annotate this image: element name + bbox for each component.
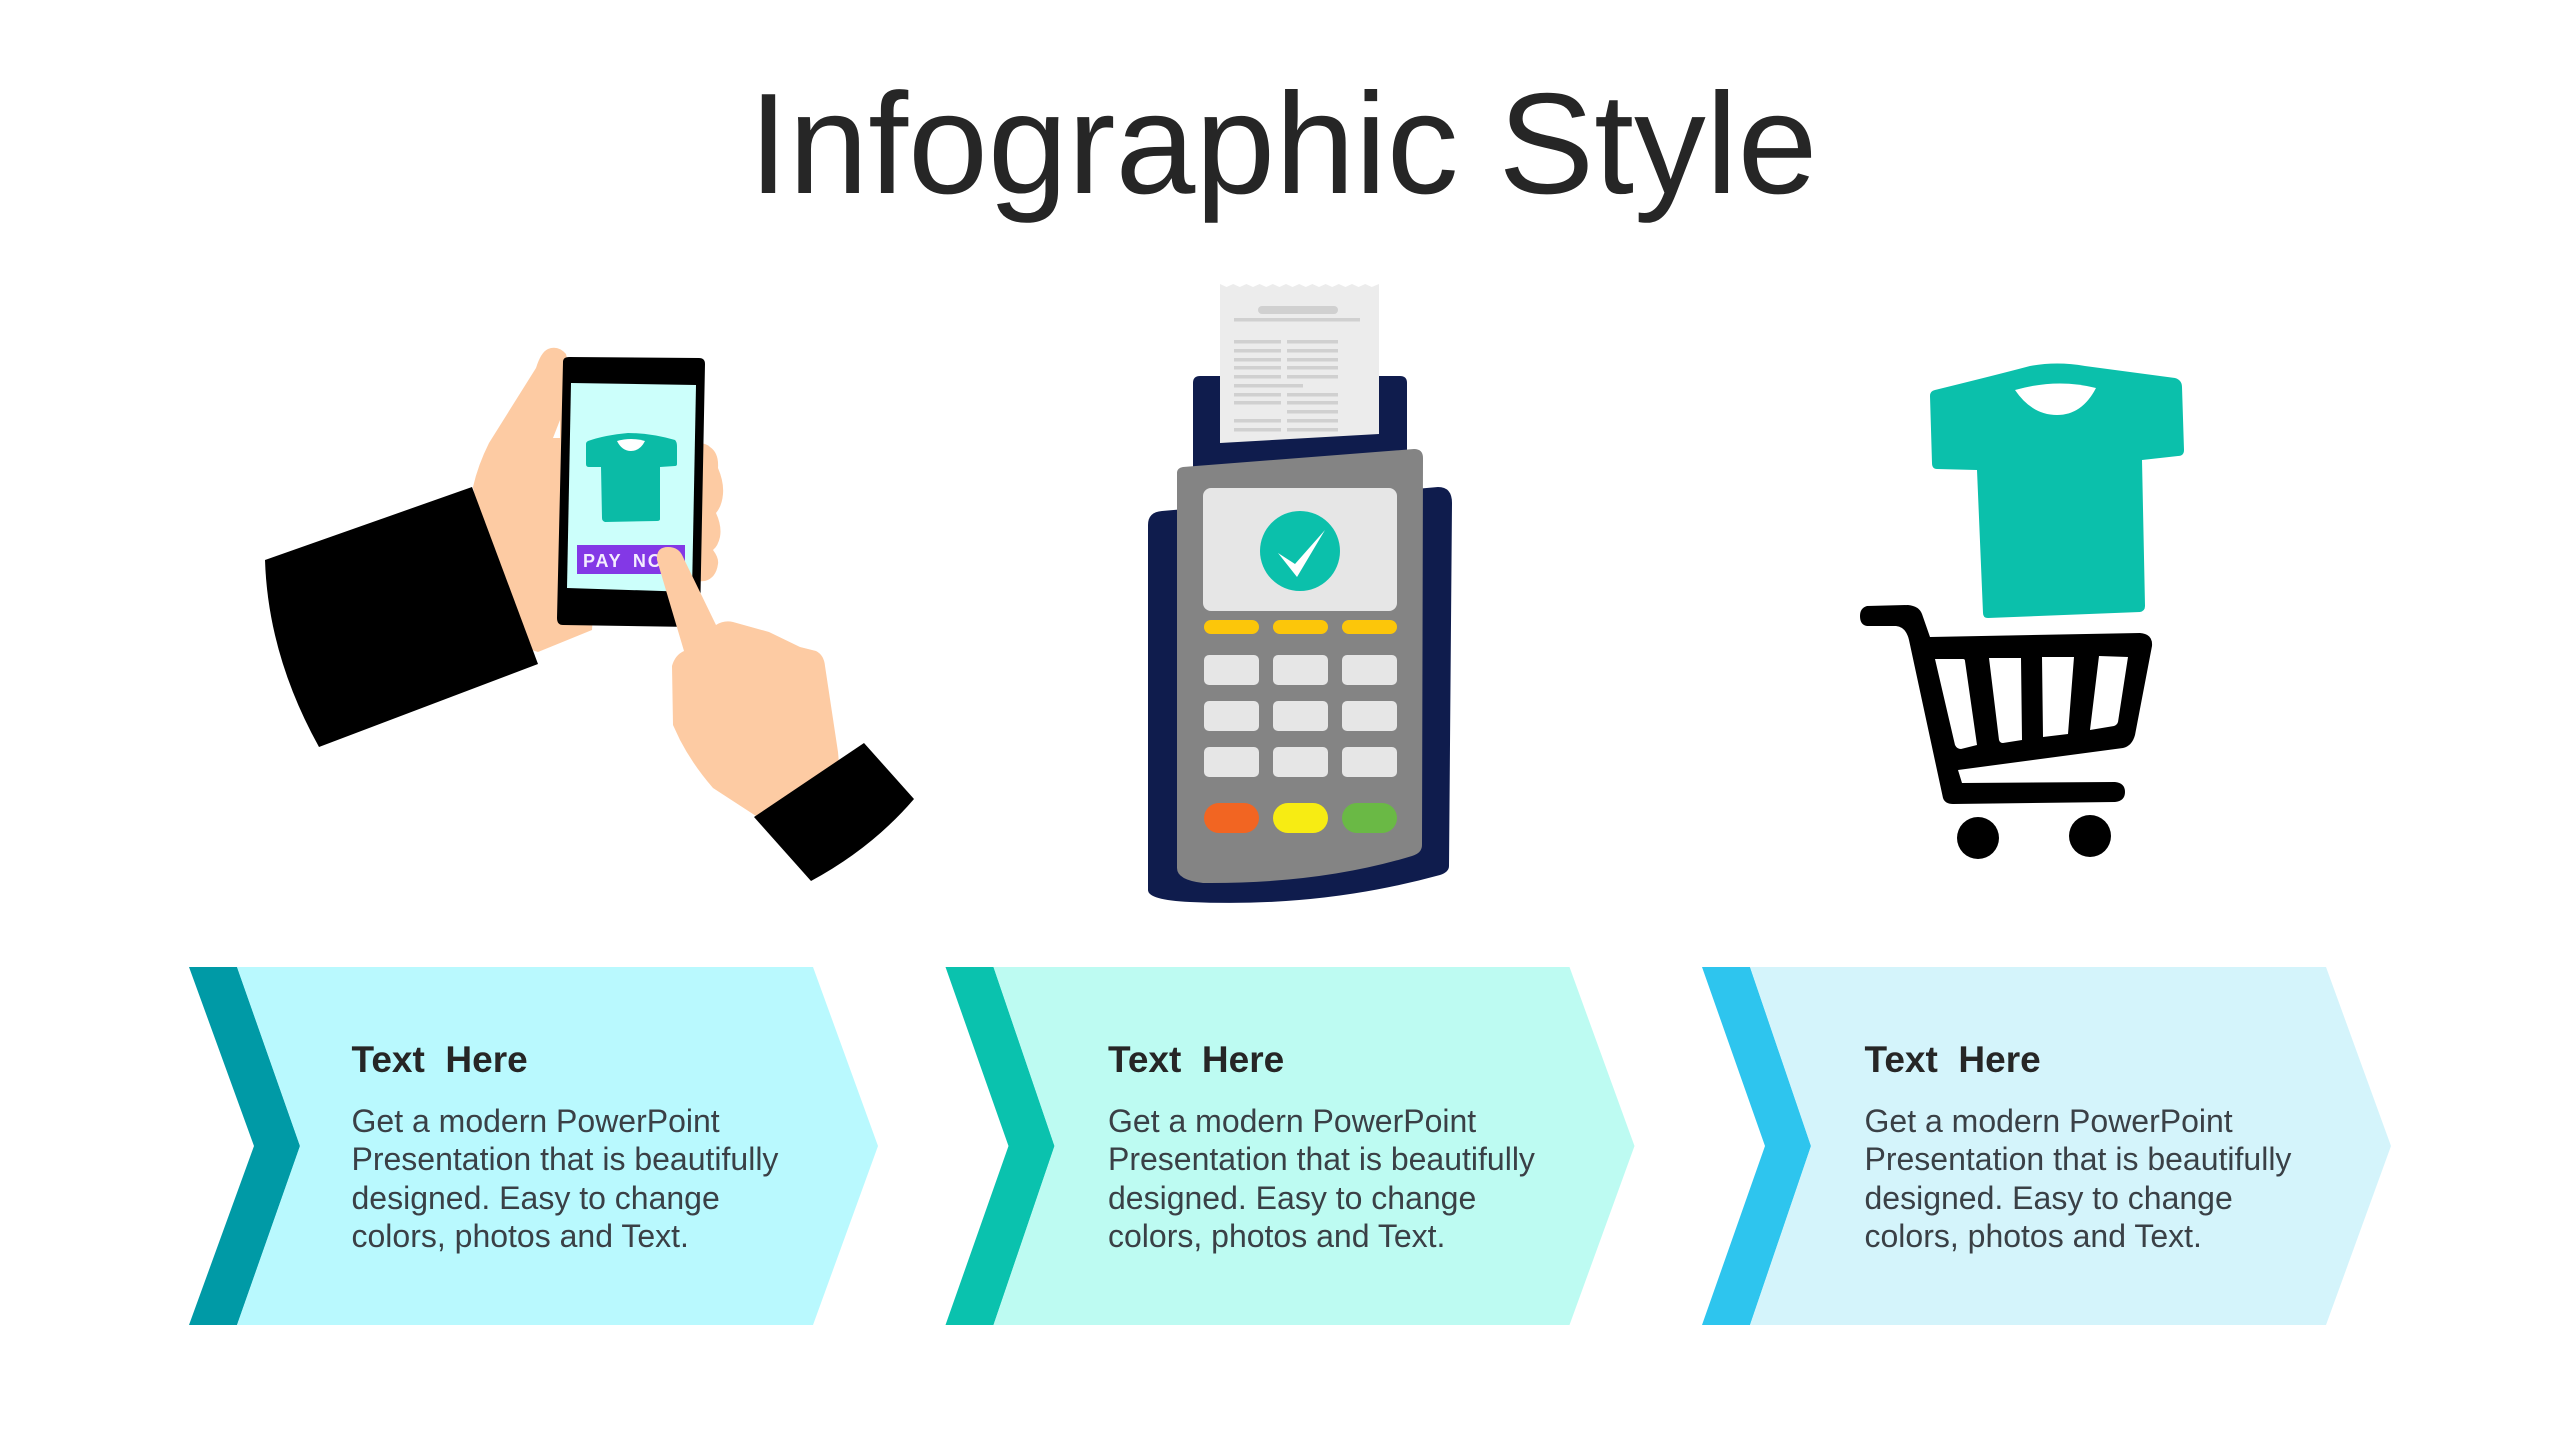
body text: designed. Easy to change [1108, 1180, 1476, 1216]
pay now button [577, 545, 685, 574]
panel: text arrow 2 [946, 967, 1634, 1325]
arrow band [946, 967, 1054, 1325]
body text: designed. Easy to change [352, 1180, 720, 1216]
panel: text arrow 1 [189, 967, 878, 1325]
heading: Text Here [1108, 1039, 1284, 1080]
hand gap highlight [553, 420, 560, 438]
yellow function keys [1204, 620, 1397, 634]
pay now button: PAY NOW [583, 551, 682, 571]
icon: shirt on phone [586, 433, 677, 522]
icon: shopping cart [1860, 605, 2152, 859]
arrow body [994, 967, 1634, 1325]
phone screen [567, 383, 696, 592]
terminal body [1177, 449, 1423, 883]
icon: smartphone [557, 357, 705, 627]
body text: designed. Easy to change [1864, 1180, 2233, 1216]
title: Infographic Style [749, 64, 1817, 224]
icon: holding hand fingers [690, 443, 723, 582]
icon: pointing hand [657, 547, 840, 825]
action buttons [1204, 803, 1397, 833]
arrow band [189, 967, 300, 1325]
terminal screen [1203, 488, 1397, 611]
icon: suit sleeve left [265, 487, 538, 747]
arrow body [237, 967, 878, 1325]
printed receipt [1220, 284, 1379, 443]
heading: Text Here [352, 1039, 528, 1080]
arrow band [1702, 967, 1811, 1325]
icon: suit cuff right [754, 743, 914, 881]
body text: Presentation that is beautifully [1108, 1141, 1535, 1177]
illustration: payment terminal [1148, 284, 1452, 903]
icon: holding hand palm [473, 348, 600, 652]
body text: Presentation that is beautifully [352, 1141, 778, 1177]
terminal upper back [1193, 376, 1407, 470]
heading: Text Here [1864, 1039, 2041, 1080]
body text: Presentation that is beautifully [1864, 1141, 2291, 1177]
illustration: hands holding phone [265, 348, 914, 881]
panel: text arrow 3 [1702, 967, 2391, 1325]
body text: colors, photos and Text. [352, 1218, 689, 1254]
body text: colors, photos and Text. [1108, 1218, 1445, 1254]
illustration: shirt and shopping cart [1860, 364, 2184, 859]
icon: shirt [1930, 364, 2184, 618]
body text: Get a modern PowerPoint [1108, 1103, 1476, 1139]
arrow body [1750, 967, 2391, 1325]
number keypad [1204, 655, 1397, 777]
body text: Get a modern PowerPoint [352, 1103, 720, 1139]
icon: check mark [1260, 511, 1340, 591]
body text: Get a modern PowerPoint [1864, 1103, 2233, 1139]
terminal base [1148, 487, 1452, 903]
body text: colors, photos and Text. [1864, 1218, 2202, 1254]
